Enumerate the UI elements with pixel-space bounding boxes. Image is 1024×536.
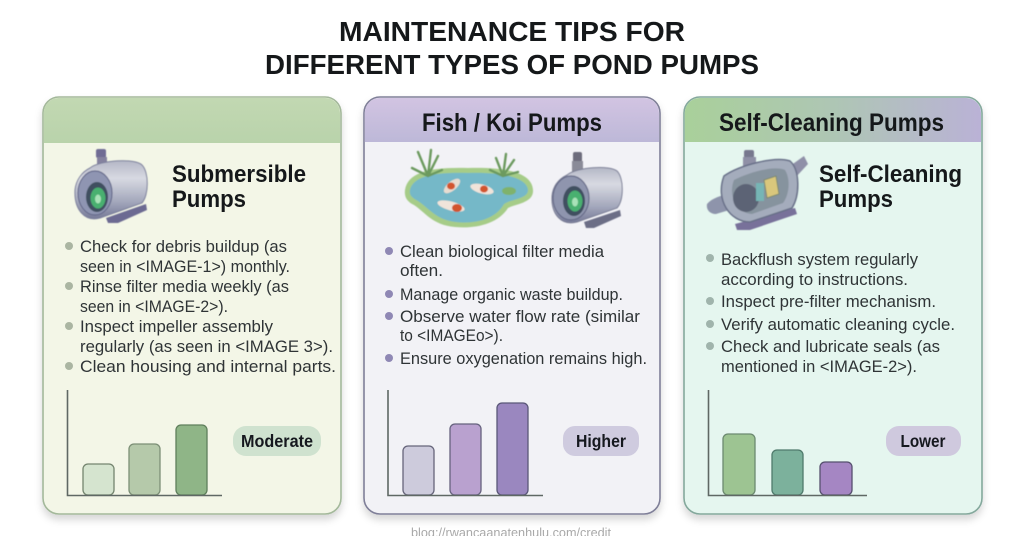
- panel 2 bullet list: Ensure oxygenation remains high.: [400, 349, 647, 368]
- panel 1 bullet list: Inspect impeller assembly: [80, 317, 273, 336]
- panel 2 header title: Fish / Koi Pumps: [422, 109, 602, 137]
- panel 3 bullet list: Backflush system regularly: [721, 250, 918, 269]
- panel: fish / koi pumps: [364, 97, 660, 514]
- panel 3 bullet list: Inspect pre-filter mechanism.: [721, 292, 936, 311]
- icon: koi pond: [405, 150, 533, 227]
- panel 1 bullet list: [65, 237, 336, 376]
- panel 3 rating pill: [886, 426, 961, 456]
- panel 3 heading: Self-Cleaning: [819, 161, 962, 188]
- panel: self-cleaning pumps: [684, 97, 982, 514]
- panel 3 heading: Pumps: [819, 186, 893, 213]
- panel 3 rating pill: Lower: [900, 431, 946, 451]
- panel 3 bullet list: mentioned in <IMAGE-2>).: [721, 357, 917, 376]
- title: [265, 16, 759, 80]
- panel 2 bullet list: Manage organic waste buildup.: [400, 285, 623, 304]
- icon: submersible pump: [75, 149, 147, 223]
- panel 1 bullet list: Rinse filter media weekly (as: [80, 277, 289, 296]
- panel 3 header title: Self-Cleaning Pumps: [719, 109, 944, 137]
- panel 2 rating pill: Higher: [576, 431, 626, 451]
- panel 2 bullet list: Clean biological filter media: [400, 242, 605, 261]
- panel 2 bullet list: to <IMAGEo>).: [400, 326, 503, 345]
- panel 1 bullet list: Clean housing and internal parts.: [80, 357, 336, 376]
- panel 1 bullet list: regularly (as seen in <IMAGE 3>).: [80, 337, 333, 356]
- panel 1 bar chart: [68, 390, 222, 496]
- panel 1 bullet list: Check for debris buildup (as: [80, 237, 287, 256]
- panel 2 rating pill: [563, 426, 639, 456]
- panel 2 header band: [365, 98, 659, 142]
- panel 1 card background: [43, 97, 341, 514]
- panel 3 heading: [819, 161, 962, 213]
- icon: self-cleaning pump cutaway: [707, 150, 808, 230]
- panel 1 rating pill: [233, 426, 321, 456]
- panel 2 bullet list: often.: [400, 261, 443, 280]
- panel 1 bullet list: seen in <IMAGE-1>) monthly.: [80, 257, 290, 276]
- panel 1 rating pill: Moderate: [241, 431, 313, 451]
- panel 1 heading: Pumps: [172, 186, 246, 213]
- title: MAINTENANCE TIPS FOR: [339, 16, 685, 47]
- panel 3 bullet list: Verify automatic cleaning cycle.: [721, 315, 955, 334]
- panel 3 bar chart: [708, 390, 867, 496]
- panel 1 header band: [44, 98, 340, 143]
- panel 2 bullet list: Observe water flow rate (similar: [400, 307, 640, 326]
- panel 3 bullet list: [706, 250, 955, 376]
- panel 1 heading: Submersible: [172, 161, 306, 188]
- title: DIFFERENT TYPES OF POND PUMPS: [265, 49, 759, 80]
- panel 2 bullet list: [385, 242, 647, 368]
- panel: submersible pumps: [43, 97, 341, 514]
- panel 2 card background: [364, 97, 660, 514]
- panel 3 header band: [685, 98, 981, 142]
- panel 1 heading: [172, 161, 306, 213]
- panel 3 bullet list: according to instructions.: [721, 270, 908, 289]
- icon: pump: [552, 152, 622, 228]
- panel 3 card background: [684, 97, 982, 514]
- panel 3 bullet list: Check and lubricate seals (as: [721, 337, 940, 356]
- panel 1 bullet list: seen in <IMAGE-2>).: [80, 297, 228, 316]
- panel 2 bar chart: [388, 390, 543, 496]
